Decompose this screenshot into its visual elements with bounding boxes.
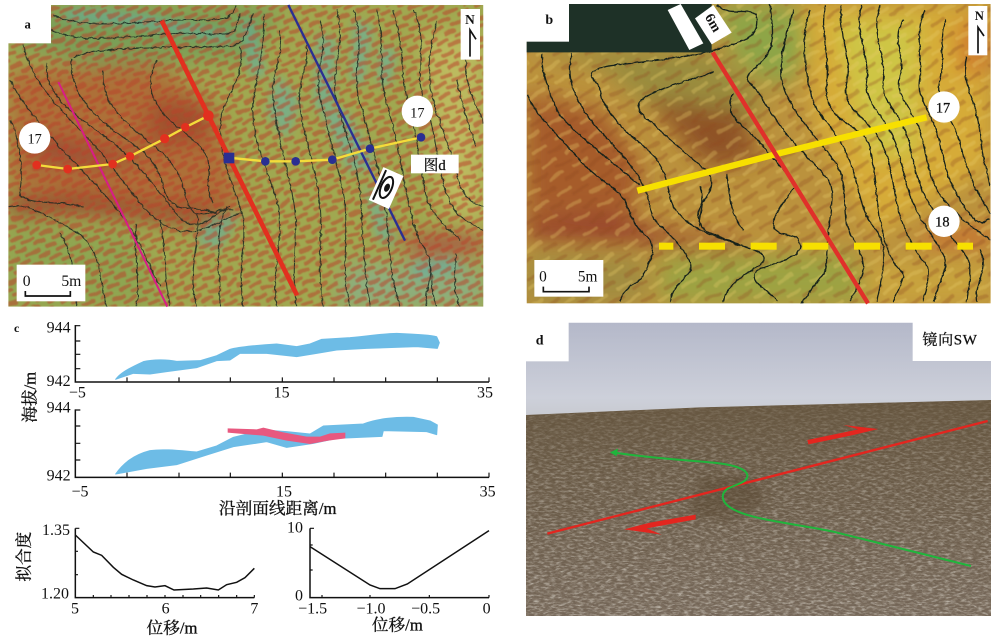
chart: lower profile with overlay: 942 bbox=[47, 468, 71, 485]
label: figure d bbox=[411, 155, 459, 174]
scale bar b bbox=[534, 260, 603, 297]
chart: fit east: −1.5 bbox=[298, 600, 327, 617]
chart: upper profile: 35 bbox=[477, 385, 493, 402]
red slip arrow upper bbox=[807, 425, 878, 444]
label: figure d: 图d bbox=[424, 157, 446, 174]
marker 17 bbox=[928, 91, 960, 123]
chart: fit east: 0 bbox=[483, 600, 491, 617]
chart: fit west bbox=[41, 522, 258, 638]
magenta fault line bbox=[58, 82, 167, 307]
white tab d: d bbox=[536, 334, 544, 349]
white tab d bbox=[520, 320, 569, 361]
red main fault line bbox=[162, 21, 297, 295]
icon: eye viewpoint bbox=[369, 167, 404, 209]
dashed yellow line bbox=[659, 243, 973, 250]
red fault over yellow bbox=[767, 140, 782, 164]
scale bar b: 0 bbox=[539, 268, 547, 285]
chart: fit west: 1.35 bbox=[42, 522, 70, 539]
y axis title fit: 拟合度 bbox=[14, 531, 33, 582]
chart: upper profile: −5 bbox=[69, 385, 86, 402]
panel b: contour map bbox=[527, 4, 991, 309]
label a tab: a bbox=[25, 18, 32, 32]
map b background bbox=[527, 4, 991, 303]
red fault line b bbox=[713, 52, 868, 303]
chart: lower profile with overlay: 35 bbox=[480, 483, 496, 500]
y axis title: 海拔/m bbox=[20, 372, 39, 423]
chart: fit east: 位移/m bbox=[372, 616, 423, 635]
chart: fit west: 1.20 bbox=[41, 585, 69, 602]
marker 17 west bbox=[19, 122, 50, 154]
marker 17: 17 bbox=[936, 100, 950, 116]
label b tab bbox=[523, 2, 569, 42]
chart: fit west: 6 bbox=[162, 600, 170, 617]
north arrow a bbox=[461, 9, 480, 60]
scale bar a: 0 bbox=[23, 273, 31, 290]
yellow profile line bbox=[637, 117, 927, 191]
chart: upper profile: 15 bbox=[274, 385, 290, 402]
red fault trace bbox=[547, 421, 988, 534]
chart: fit east: −1.0 bbox=[356, 600, 386, 617]
north arrow a: N bbox=[465, 12, 475, 27]
red slip arrow lower bbox=[624, 515, 696, 535]
chart: upper profile: 942 bbox=[47, 373, 71, 390]
red-pink shifted profile bbox=[228, 428, 345, 444]
marker 17 east: 17 bbox=[410, 105, 424, 121]
panel a: contour map bbox=[8, 5, 483, 307]
white offset bar bbox=[668, 4, 703, 50]
scale bar a: 5m bbox=[61, 273, 81, 290]
chart: fit east bbox=[287, 519, 491, 635]
chart: fit west: 位移/m bbox=[147, 619, 197, 638]
label 6m offset bbox=[695, 5, 732, 44]
chart: lower profile with overlay bbox=[47, 400, 496, 500]
navy fault line bbox=[288, 5, 405, 241]
x axis title: 沿剖面线距离/m bbox=[219, 499, 336, 518]
chart: fit east: 0 bbox=[295, 588, 303, 605]
map a contour lines bbox=[8, 5, 483, 307]
panel d: field photograph bbox=[520, 320, 993, 616]
label: view direction bbox=[913, 320, 993, 361]
chart: fit east: −0.5 bbox=[411, 600, 440, 617]
marker 17 east bbox=[402, 96, 433, 127]
label b tab: b bbox=[545, 13, 553, 28]
chart: upper profile bbox=[47, 320, 493, 402]
dark no-data block bbox=[527, 4, 712, 52]
label a tab bbox=[7, 3, 51, 43]
yellow offset profile east bbox=[224, 133, 425, 166]
chart: lower profile with overlay: 15 bbox=[276, 483, 292, 500]
label c: c bbox=[14, 321, 20, 335]
marker 18: 18 bbox=[935, 215, 949, 231]
chart: fit west: 5 bbox=[71, 600, 79, 617]
north arrow b: N bbox=[975, 9, 984, 23]
marker 17 west: 17 bbox=[28, 131, 42, 147]
chart: lower profile with overlay: −5 bbox=[71, 483, 89, 500]
chart: fit east: 10 bbox=[287, 519, 303, 536]
north arrow b bbox=[968, 6, 987, 55]
yellow offset profile west bbox=[32, 110, 214, 173]
label 6m offset: 6m bbox=[701, 11, 724, 35]
chart: upper profile: 944 bbox=[47, 320, 71, 337]
label: view direction: 镜向SW bbox=[922, 330, 978, 348]
chart: fit west: 7 bbox=[250, 600, 258, 617]
panel c: profiles and fit charts bbox=[14, 320, 496, 638]
map a background bbox=[8, 5, 483, 307]
scale bar a bbox=[17, 265, 85, 301]
chart: lower profile with overlay: 944 bbox=[47, 400, 71, 417]
marker 18 bbox=[928, 206, 960, 237]
photo background bbox=[526, 323, 991, 616]
scale bar b: 5m bbox=[578, 268, 598, 285]
green offset stream with arrow bbox=[610, 449, 971, 566]
map b contour lines bbox=[527, 5, 990, 309]
